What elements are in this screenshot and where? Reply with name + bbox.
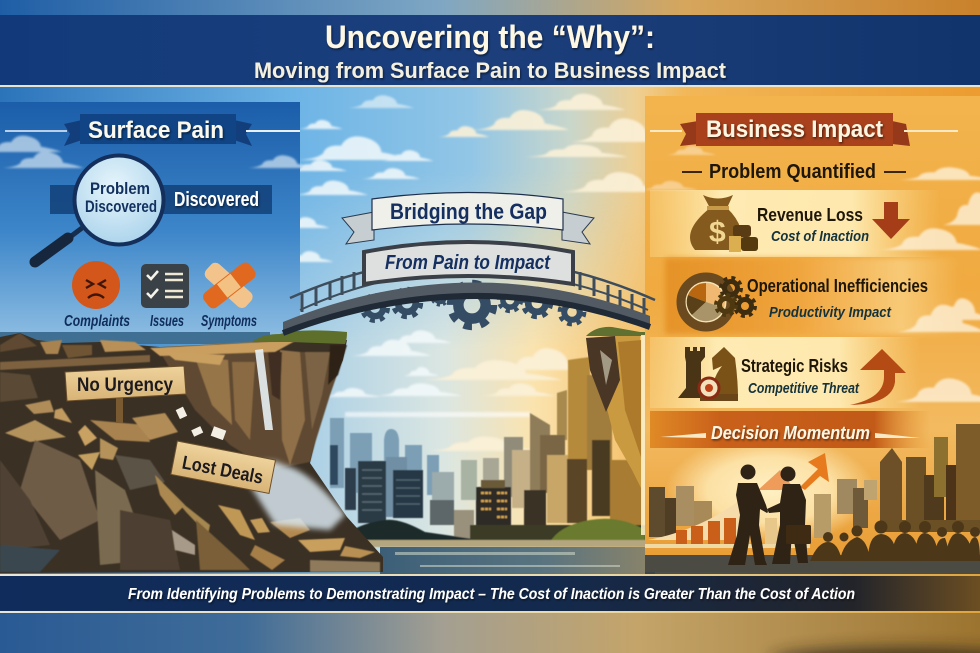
item: strategic risks — [678, 347, 906, 405]
rock slope — [0, 400, 380, 572]
icon: bandage — [201, 260, 258, 311]
sign: no urgency — [65, 366, 186, 423]
icon: money bag — [690, 195, 758, 252]
grass on cliff — [252, 330, 347, 344]
sign: no urgency: No Urgency — [77, 375, 173, 396]
icon: chess pieces — [678, 347, 738, 401]
cliff mass — [0, 333, 383, 573]
clouds — [278, 94, 673, 451]
handshake silhouettes — [728, 464, 811, 565]
banner: business impact: Business Impact — [706, 116, 883, 143]
icon: money bag: $ — [709, 216, 726, 249]
distant water behind cliff — [0, 332, 270, 344]
title band — [0, 15, 980, 87]
paper scraps — [176, 407, 226, 440]
water highlights — [395, 552, 620, 567]
item: revenue loss: Cost of Inaction — [771, 228, 869, 245]
labels: icons: Symptoms — [201, 313, 257, 330]
upper cliff face — [160, 345, 347, 470]
city skyline — [330, 357, 660, 547]
item: revenue loss: Revenue Loss — [757, 205, 863, 225]
warm tall buildings — [504, 357, 642, 530]
chart: rising bars — [645, 453, 829, 548]
splash — [240, 461, 345, 530]
top slabs — [0, 333, 297, 402]
icon: checklist — [141, 264, 189, 308]
skyline right — [814, 424, 980, 538]
bridge — [283, 258, 655, 333]
plate: from pain to impact — [364, 242, 573, 284]
subtitle: Moving from Surface Pain to Business Impact — [254, 58, 727, 83]
ribbon: bridging the gap — [342, 192, 594, 244]
panel background — [645, 96, 980, 572]
item: operational inefficiencies: Productivity Impact — [769, 304, 892, 321]
panel: business impact — [639, 96, 980, 575]
title: Uncovering the “Why”: — [325, 19, 655, 55]
side clouds — [0, 136, 314, 168]
heading: problem quantified: Problem Quantified — [709, 161, 876, 183]
item: revenue loss — [690, 195, 910, 252]
crowd silhouettes — [810, 520, 980, 561]
bottom banner: From Identifying Problems to Demonstrating Impact – The Cost of Inaction is Greater Than the Cost of Action — [128, 586, 855, 603]
clouds in panel — [639, 146, 980, 402]
banner: surface pain: Surface Pain — [88, 117, 224, 144]
labels: icons: Issues — [150, 313, 184, 330]
railing — [290, 258, 655, 316]
right cliff — [586, 327, 660, 535]
plate: from pain to impact: From Pain to Impact — [385, 252, 551, 274]
icon: pie and gears — [681, 277, 754, 327]
bottom banner — [0, 574, 980, 613]
panel: surface pain — [0, 102, 314, 338]
discovered strip — [50, 185, 272, 214]
dark road shadow — [770, 648, 980, 653]
banner: decision momentum — [650, 411, 930, 448]
arrow: up — [850, 349, 906, 405]
sign: lost deals: Lost Deals — [180, 453, 265, 489]
labels: icons: Complaints — [64, 313, 130, 330]
deck — [283, 282, 650, 332]
deck underside — [283, 296, 650, 333]
shore — [360, 540, 660, 547]
panel background — [0, 102, 300, 338]
far blue buildings — [330, 418, 499, 522]
band: revenue — [650, 190, 940, 257]
shoreline trees — [345, 519, 650, 542]
band: strategic — [650, 337, 920, 408]
cream glow behind handshake — [665, 435, 875, 545]
skyline left of handshake — [649, 486, 712, 537]
ground strip — [645, 555, 980, 575]
item: strategic risks: Strategic Risks — [741, 356, 848, 376]
item: strategic risks: Competitive Threat — [748, 380, 860, 397]
icon: magnifying glass: Discovered — [85, 197, 157, 216]
arrow: down — [872, 202, 910, 239]
gears under bridge — [364, 286, 583, 324]
item: operational inefficiencies — [681, 276, 928, 327]
icon: magnifying glass — [35, 156, 164, 262]
item: operational inefficiencies: Operational Inefficiencies — [747, 276, 928, 296]
banner: decision momentum: Decision Momentum — [711, 423, 870, 443]
band: operations — [665, 258, 960, 334]
lower warm sky — [300, 188, 645, 554]
cliff: crumbling left — [0, 330, 383, 573]
ribbon: bridging the gap: Bridging the Gap — [390, 199, 547, 224]
river — [380, 547, 655, 574]
sign: lost deals — [171, 441, 275, 493]
labels: icons — [64, 313, 257, 330]
banner: business impact — [650, 113, 958, 146]
icon: magnifying glass: Problem — [90, 179, 150, 198]
top strip — [0, 0, 980, 15]
bottom strip — [0, 610, 980, 653]
banner: surface pain — [5, 114, 300, 146]
near dark buildings — [330, 445, 546, 540]
waterfall — [255, 349, 273, 430]
icon: angry face — [72, 261, 120, 309]
discovered strip: Discovered — [174, 189, 259, 211]
